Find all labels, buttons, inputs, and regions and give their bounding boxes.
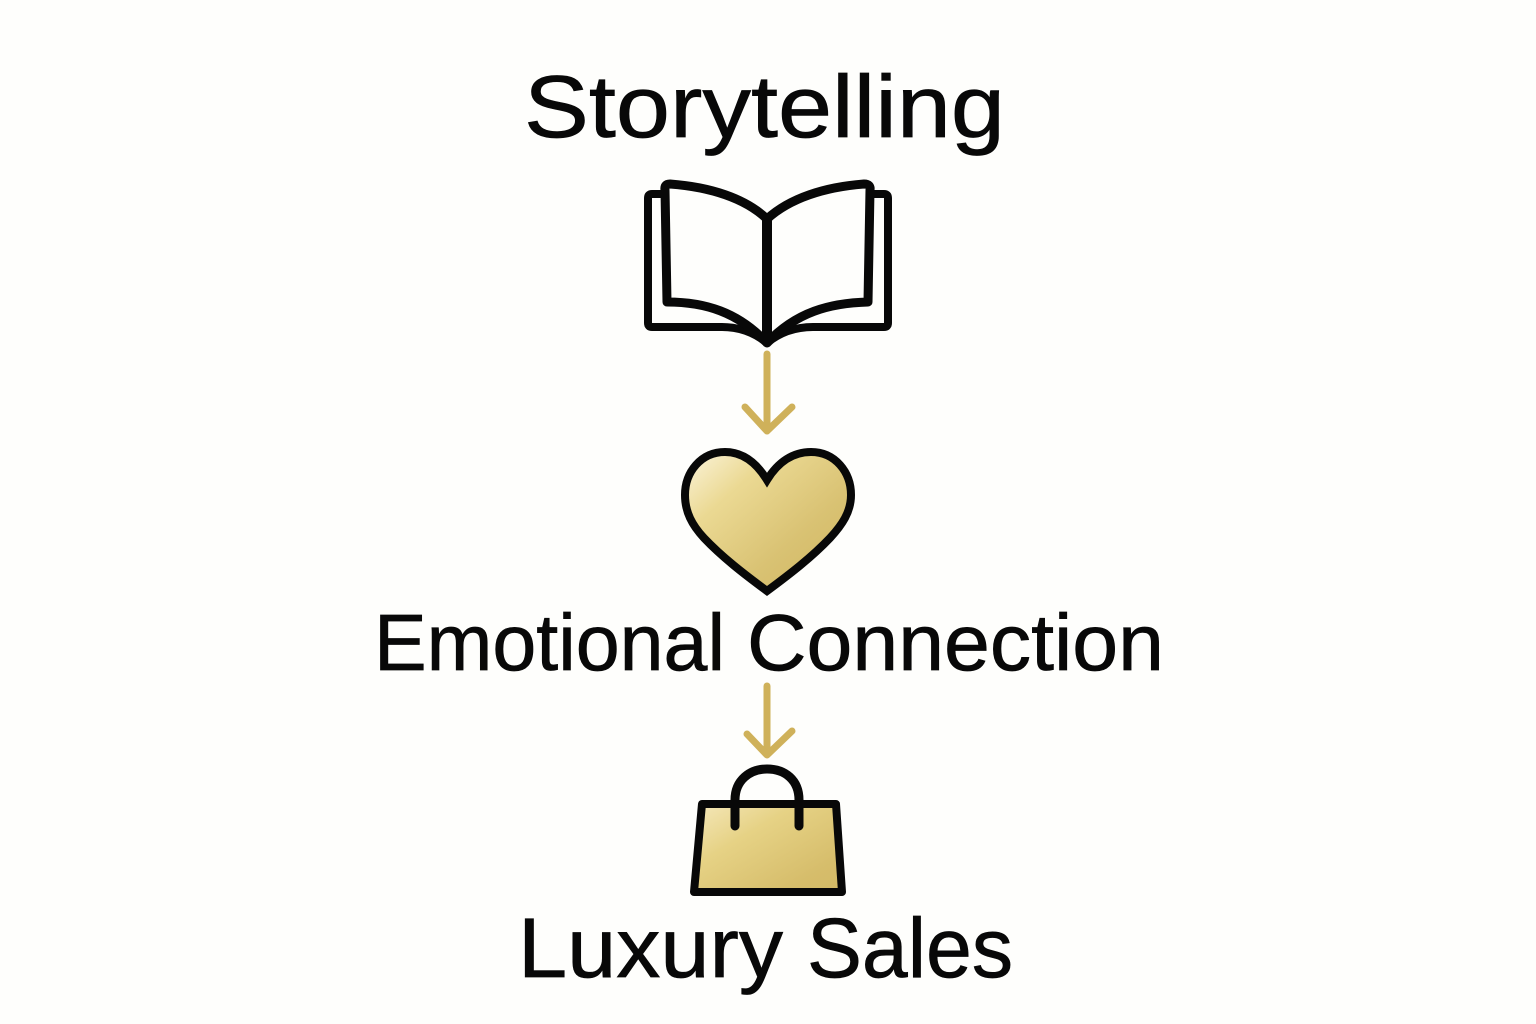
heading: Luxury Sales: Luxury — [518, 901, 783, 995]
heading: Emotional Connection: Connection — [747, 598, 1164, 687]
icon: gold shopping bag — [694, 769, 842, 892]
icon: gold heart — [685, 452, 851, 591]
heading: Storytelling: Storytelling — [524, 57, 1005, 156]
icon: open book — [648, 184, 888, 343]
heading: Luxury Sales — [518, 901, 1013, 995]
arrow: storytelling to emotional connection — [745, 354, 792, 431]
heading: Emotional Connection — [374, 598, 1164, 687]
heading: Emotional Connection: Emotional — [374, 598, 725, 687]
arrow: emotional connection to luxury sales — [747, 686, 792, 755]
heading: Luxury Sales: Sales — [807, 901, 1013, 995]
